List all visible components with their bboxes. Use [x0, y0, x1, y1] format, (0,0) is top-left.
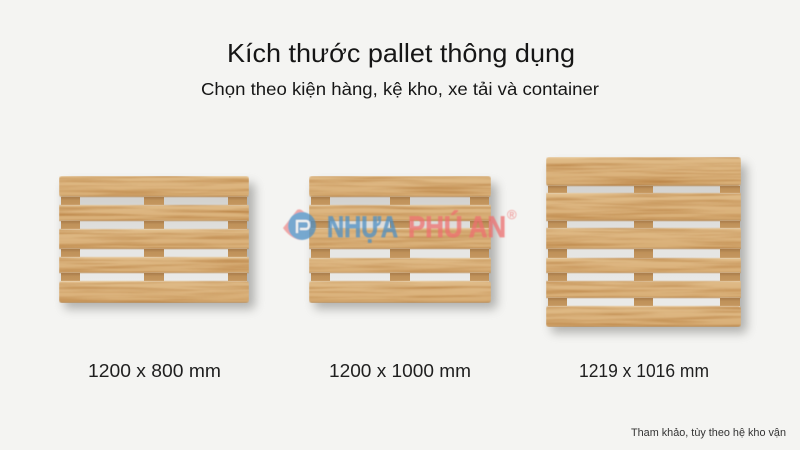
registered mark: ® — [507, 207, 517, 222]
label: 1200 x 800 mm: 1200 x 800 mm — [88, 361, 221, 381]
label: 1200 x 1000 mm: 1200 x 1000 mm — [329, 361, 471, 381]
label: 1219 x 1016 mm: 1219 x 1016 mm — [579, 361, 709, 381]
subtitle: Chọn theo kiện hàng, kệ kho, xe tải và container — [201, 79, 599, 99]
wordmark red: PHÚ AN — [408, 210, 506, 244]
pallet: 1200 x 800 mm — [59, 176, 255, 309]
watermark: Nhựa Phú An logo — [283, 207, 517, 244]
wordmark blue: NHỰA — [327, 211, 398, 244]
pallet: 1219 x 1016 mm — [546, 157, 747, 333]
pallet: 1200 x 1000 mm — [309, 176, 497, 309]
footnote: Tham khảo, tùy theo hệ kho vận — [631, 427, 786, 439]
icon: logo mark — [283, 209, 316, 240]
title: Kích thước pallet thông dụng — [227, 38, 575, 68]
